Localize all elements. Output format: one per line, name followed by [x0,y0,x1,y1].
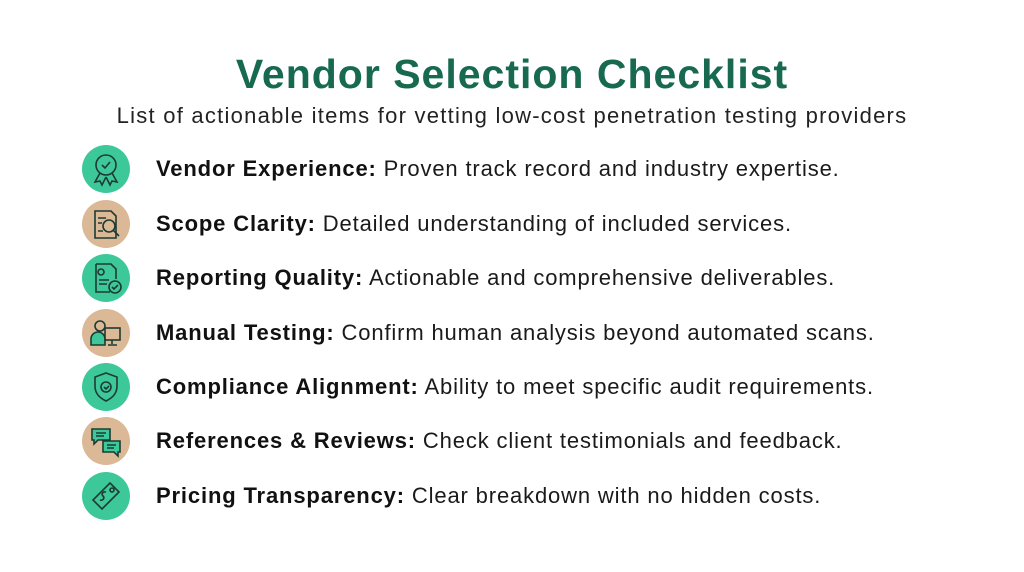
subtitle: List of actionable items for vetting low-cost penetration testing providers [117,103,907,128]
item: vendor experience [82,145,840,193]
icon: chat bubbles [82,417,130,465]
icon: document search [82,200,130,248]
text: References & Reviews: Check client testimonials and feedback. [156,428,843,453]
text: Manual Testing: Confirm human analysis beyond automated scans. [156,320,875,345]
icon: person at computer [82,309,130,357]
icon: award [82,145,130,193]
icon: shield [82,363,130,411]
item: reporting quality [82,254,835,302]
item: references & reviews [82,417,843,465]
text: Pricing Transparency: Clear breakdown with no hidden costs. [156,483,821,508]
icon: report check [82,254,130,302]
text: Reporting Quality: Actionable and comprehensive deliverables. [156,265,835,290]
item: compliance alignment [82,363,874,411]
text: Scope Clarity: Detailed understanding of included services. [156,211,792,236]
item: manual testing [82,309,875,357]
text: Vendor Experience: Proven track record and industry expertise. [156,156,840,181]
item: scope clarity [82,200,792,248]
item: pricing transparency [82,472,821,520]
icon: price tag [82,472,130,520]
text: Compliance Alignment: Ability to meet specific audit requirements. [156,374,874,399]
title: Vendor Selection Checklist [236,51,788,97]
